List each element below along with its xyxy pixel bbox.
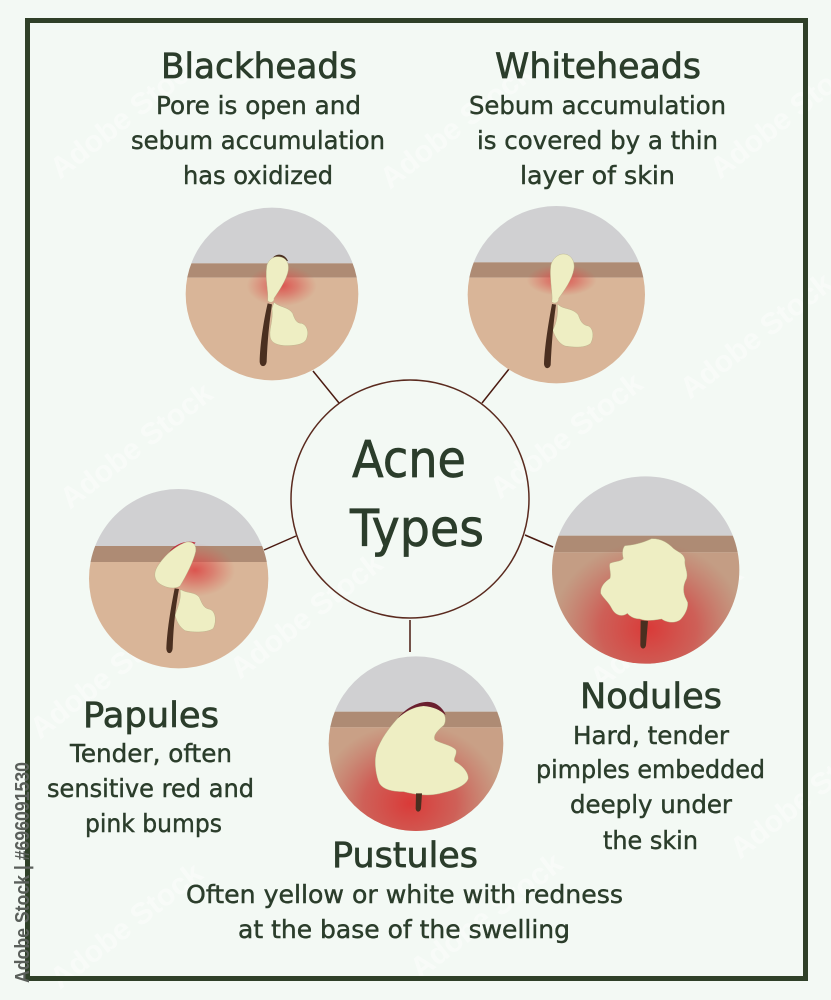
connector: center to whiteheads	[482, 369, 509, 403]
connector: center to papules	[264, 536, 296, 550]
heading and text: Nodules: the skin	[603, 826, 698, 855]
illustration: whitehead cross-section	[467, 205, 647, 384]
central hub: Acne Types: Acne	[352, 431, 466, 490]
heading and text: Whiteheads: Sebum accumulation	[469, 91, 726, 120]
heading and text: Papules: Tender, often	[69, 739, 232, 768]
heading and text: Papules: pink bumps	[85, 809, 222, 838]
heading and text: Pustules: Often yellow or white with redness	[186, 880, 623, 909]
heading and text: Papules: sensitive red and	[47, 774, 254, 803]
heading and text: Papules: Papules	[83, 696, 219, 736]
connector: center to blackheads	[313, 371, 339, 403]
heading and text: Whiteheads	[469, 47, 726, 190]
heading and text: Nodules: Hard, tender	[573, 721, 730, 750]
heading and text: Nodules: pimples embedded	[536, 755, 765, 784]
text: Adobe Stock	[374, 56, 539, 196]
illustration: papule cross-section	[87, 487, 273, 672]
heading and text: Nodules: deeply under	[570, 790, 733, 819]
heading and text: Pustules: at the base of the swelling	[238, 915, 570, 944]
heading and text: Blackheads	[131, 47, 385, 190]
heading and text: Nodules: Nodules	[580, 677, 722, 717]
connector: center to pustules	[409, 620, 411, 652]
heading and text: Whiteheads: is covered by a thin	[477, 126, 718, 155]
heading and text: Whiteheads: Whiteheads	[495, 47, 701, 87]
text: Adobe Stock	[44, 856, 209, 996]
central hub: Acne Types: Types	[349, 500, 484, 559]
heading and text: Pustules	[186, 836, 623, 944]
heading and text: Blackheads: has oxidized	[183, 161, 333, 190]
heading and text: Papules	[47, 696, 254, 838]
text: Adobe Stock	[24, 606, 189, 746]
heading and text: Nodules	[536, 677, 765, 855]
heading and text: Blackheads: sebum accumulation	[131, 126, 385, 155]
text: Adobe Stock	[484, 366, 649, 506]
heading and text: Blackheads: Blackheads	[161, 47, 357, 87]
illustration: blackhead cross-section	[183, 205, 360, 384]
text: Adobe Stock	[584, 556, 749, 696]
illustration: nodule cross-section	[552, 476, 740, 664]
text: Adobe Stock	[224, 546, 389, 686]
heading and text: Pustules: Pustules	[332, 836, 478, 876]
text: Adobe Stock	[404, 846, 569, 986]
illustration: pustule cross-section	[328, 656, 504, 831]
heading and text: Whiteheads: layer of skin	[520, 161, 675, 190]
text: Adobe Stock	[44, 46, 209, 186]
central hub: Acne Types	[291, 380, 529, 618]
text: Adobe Stock	[54, 376, 219, 516]
heading and text: Blackheads: Pore is open and	[156, 91, 361, 120]
connector: center to nodules	[525, 535, 553, 547]
stock credit: Adobe Stock | #696091530	[12, 762, 34, 983]
